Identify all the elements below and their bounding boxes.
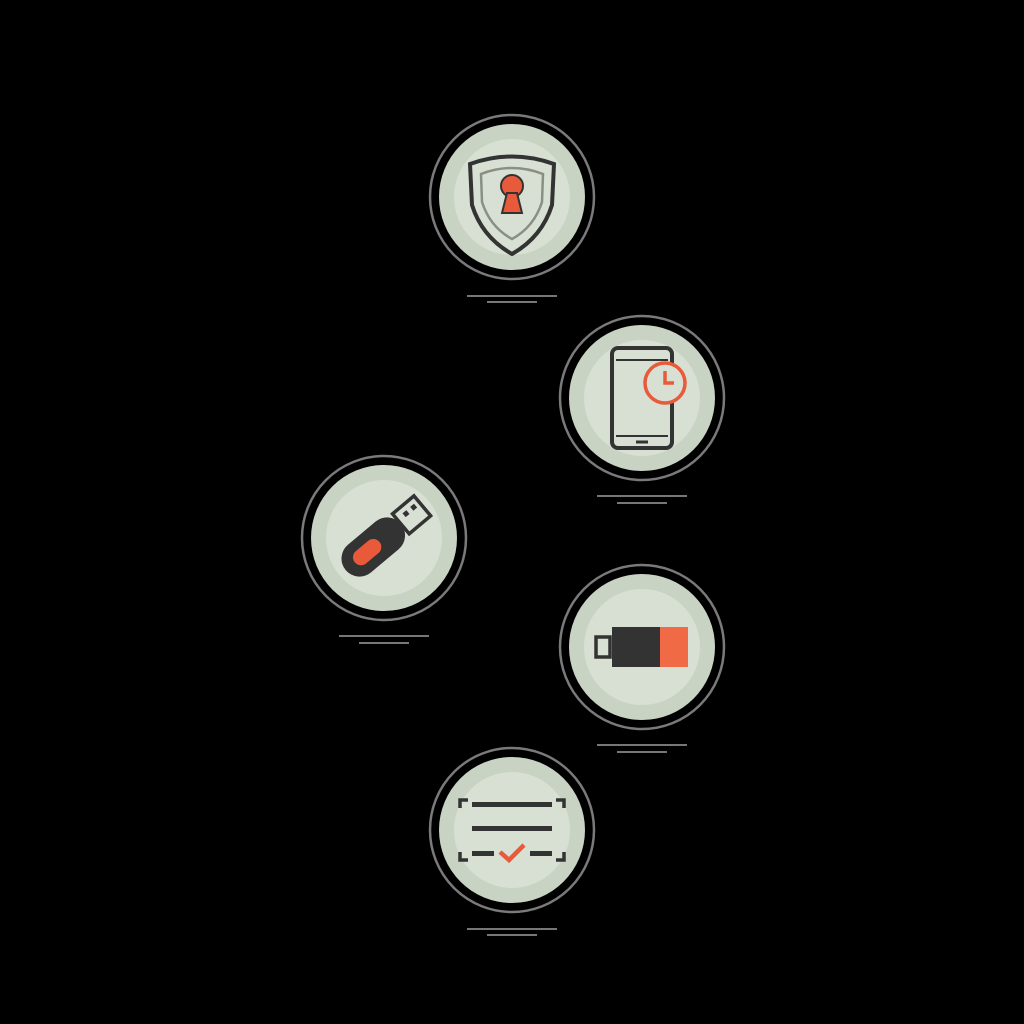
icon: phone with clock — [560, 316, 724, 504]
icon: low battery — [560, 565, 724, 753]
icon: checklist document — [430, 748, 594, 936]
icon: shield with keyhole — [430, 115, 594, 303]
icon: usb flash drive — [302, 456, 466, 644]
